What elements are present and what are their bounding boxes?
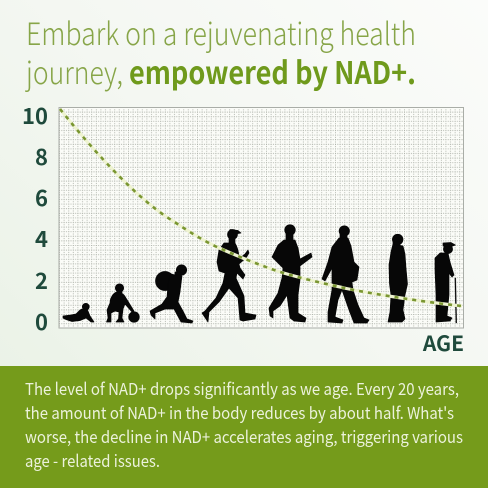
title: journey, [24,48,123,93]
icon: older adult standing [388,234,408,322]
title: Embark on a rejuvenating health [26,9,416,54]
body text: age - related issues. [25,448,160,472]
icon: elder with cane [435,242,457,323]
icon: baby crawling [63,303,94,322]
title: empowered by NAD+. [129,48,416,93]
body text [25,376,463,472]
icon: adult with briefcase [322,226,369,323]
decline curve [60,109,462,306]
silhouettes: life stages [63,225,457,323]
panel: description [0,366,488,488]
title [24,9,416,93]
y-axis labels [22,99,48,337]
icon: toddler with ball [106,284,139,322]
y-axis labels: 10 [22,99,48,131]
icon: teenager with phone [202,230,256,322]
y-axis labels: 6 [35,181,48,213]
body text: the amount of NAD+ in the body reduces by about half. What's [25,400,454,424]
x-axis label: AGE [422,328,464,358]
chart grid [59,108,464,328]
chart: NAD+ decline with age [59,108,464,328]
icon: young adult walking [269,225,312,322]
y-axis labels: 8 [35,140,48,172]
y-axis labels: 0 [35,305,48,337]
y-axis labels: 2 [35,264,48,296]
icon: child with backpack [150,265,193,323]
y-axis labels: 4 [35,222,48,254]
